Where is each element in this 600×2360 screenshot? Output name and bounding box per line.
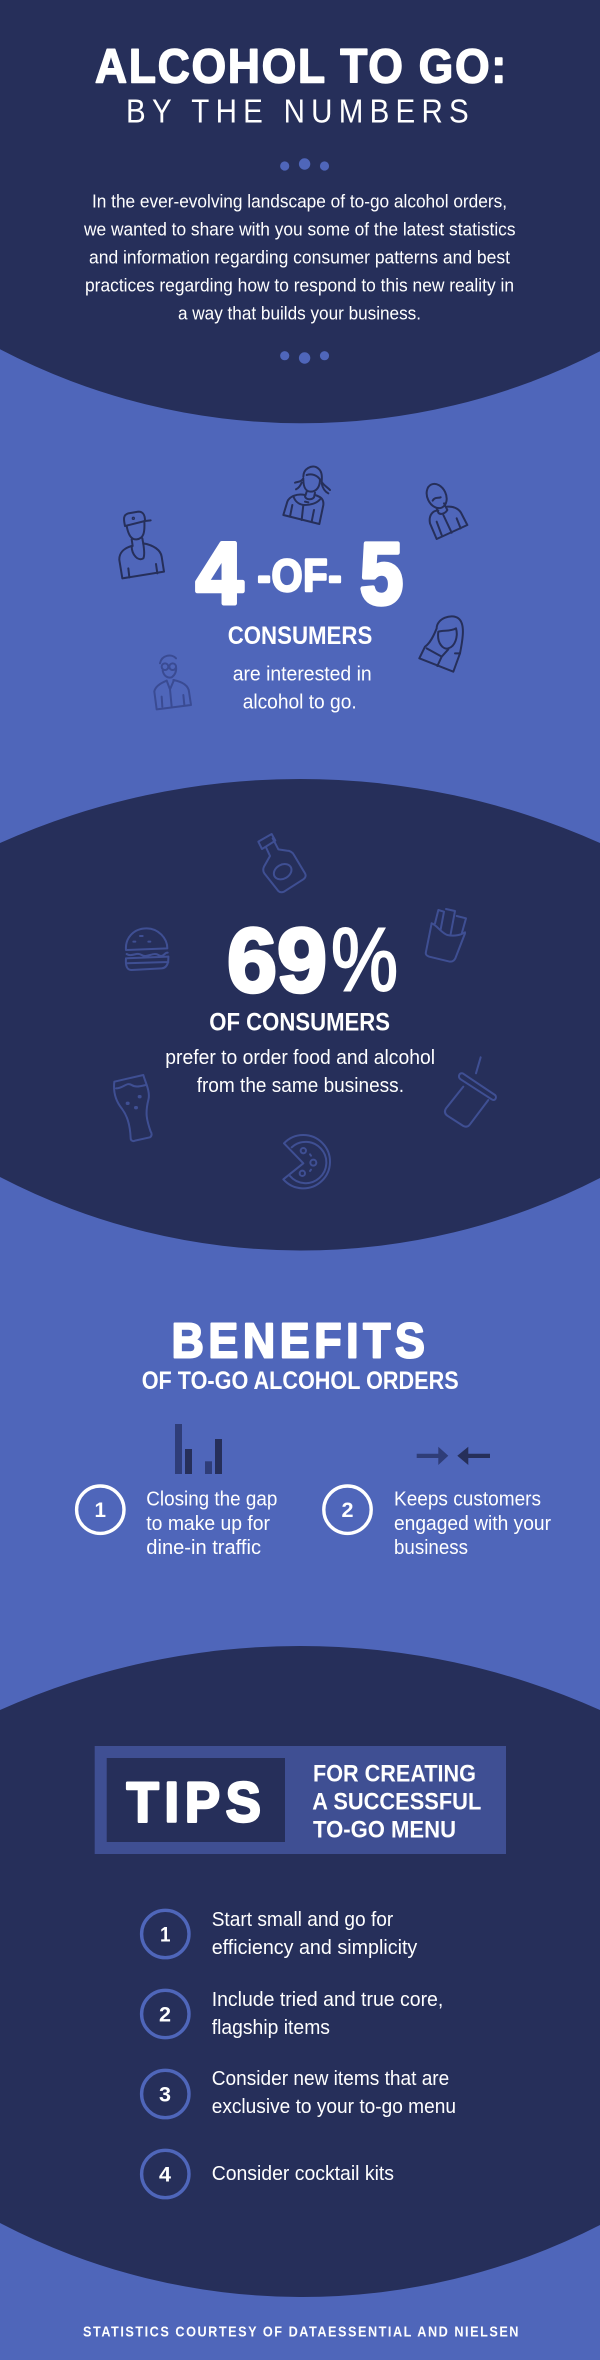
panel: 69 percent background xyxy=(0,779,600,1250)
title xyxy=(95,40,508,130)
benefit 1: 1 xyxy=(94,1499,106,1522)
benefit 1: to make up for xyxy=(146,1513,270,1535)
benefit 1 xyxy=(77,1486,277,1559)
intro text xyxy=(83,191,516,323)
tip 3: 3 xyxy=(159,2084,171,2107)
stat: 69 percent xyxy=(227,910,398,1012)
intro text: practices regarding how to respond to this new reality in xyxy=(85,275,514,295)
stat: 4 of 5: -OF- xyxy=(258,550,342,601)
title: BY THE NUMBERS xyxy=(126,93,475,130)
bottom dots xyxy=(280,351,329,364)
tip 2: Include tried and true core, xyxy=(212,1989,443,2011)
stat: 4 of 5: 4 xyxy=(196,525,243,622)
icon: man with glasses xyxy=(154,656,191,709)
heading: benefits xyxy=(142,1314,459,1395)
tip 4: Consider cocktail kits xyxy=(212,2163,394,2185)
heading: benefits: OF TO-GO ALCOHOL ORDERS xyxy=(142,1367,459,1395)
tip 4: 4 xyxy=(159,2164,171,2187)
icon: cup with straw xyxy=(445,1057,496,1127)
benefit 2: engaged with your xyxy=(394,1513,551,1535)
tip 1: Start small and go for xyxy=(212,1909,394,1931)
stat: 69 percent: % xyxy=(331,910,398,1010)
text: interested xyxy=(233,664,372,714)
stat: 4 of 5 xyxy=(196,525,403,622)
tip 2: 2 xyxy=(159,2004,171,2027)
panel: header background xyxy=(0,0,600,423)
icon: fries xyxy=(426,909,466,962)
title: ALCOHOL TO GO: xyxy=(95,40,508,94)
benefit 1: Closing the gap xyxy=(146,1489,277,1511)
benefit 2: Keeps customers xyxy=(394,1489,541,1511)
text: prefer xyxy=(165,1047,435,1097)
tip 3: Consider new items that are xyxy=(212,2068,449,2090)
heading: of consumers: OF CONSUMERS xyxy=(209,1009,390,1037)
icon: bottle xyxy=(258,834,306,892)
tip 1: 1 xyxy=(160,1924,171,1947)
icon: burger xyxy=(126,928,168,970)
tip 3 xyxy=(142,2068,456,2118)
tip 4 xyxy=(142,2150,394,2198)
heading: benefits: BENEFITS xyxy=(172,1314,430,1368)
top dots xyxy=(280,158,329,171)
stat: 4 of 5: 5 xyxy=(360,526,403,622)
food icons xyxy=(114,834,496,1188)
tip 3: exclusive to your to-go menu xyxy=(212,2096,456,2118)
icon: woman with wavy hair xyxy=(283,467,330,524)
panel: tips banner: TIPS xyxy=(126,1770,266,1834)
tip 2: flagship items xyxy=(212,2017,330,2039)
tip 1 xyxy=(142,1909,417,1959)
icon: bar chart gap xyxy=(175,1424,222,1474)
heading: consumers: CONSUMERS xyxy=(228,622,372,650)
benefit 2: business xyxy=(394,1537,468,1559)
people icons xyxy=(119,467,467,709)
text: prefer: prefer to order food and alcohol xyxy=(165,1047,435,1069)
benefit 2 xyxy=(324,1486,551,1559)
text: interested: are interested in xyxy=(233,664,372,686)
text: prefer: from the same business. xyxy=(197,1075,404,1097)
icon: beer glass xyxy=(114,1075,152,1141)
tip 2 xyxy=(142,1989,443,2039)
intro text: and information regarding consumer patterns and best xyxy=(89,247,510,267)
footer credit: STATISTICS COURTESY OF DATAESSENTIAL AND NIELSEN xyxy=(83,2323,520,2340)
icon: converging arrows xyxy=(417,1447,490,1465)
stat: 69 percent: 69 xyxy=(227,910,327,1012)
benefit 2: 2 xyxy=(342,1499,354,1522)
intro text: a way that builds your business. xyxy=(178,303,421,323)
panel: tips banner: FOR CREATING xyxy=(313,1761,476,1788)
icon: man in cap xyxy=(119,512,164,578)
benefit 1: dine-in traffic xyxy=(146,1537,261,1559)
icon: man with moustache xyxy=(423,481,467,539)
panel: tips banner xyxy=(95,1746,506,1854)
icon: woman with long hair xyxy=(419,616,463,672)
panel: tips banner: A SUCCESSFUL xyxy=(312,1788,481,1815)
panel: tips banner: TO-GO MENU xyxy=(313,1816,456,1843)
panel: tips background xyxy=(0,1646,600,2297)
intro text: we wanted to share with you some of the latest statistics xyxy=(83,219,516,239)
tip 1: efficiency and simplicity xyxy=(212,1937,417,1959)
icon: pizza xyxy=(283,1135,330,1188)
text: interested: alcohol to go. xyxy=(243,692,357,714)
intro text: In the ever-evolving landscape of to-go alcohol orders, xyxy=(92,191,507,211)
